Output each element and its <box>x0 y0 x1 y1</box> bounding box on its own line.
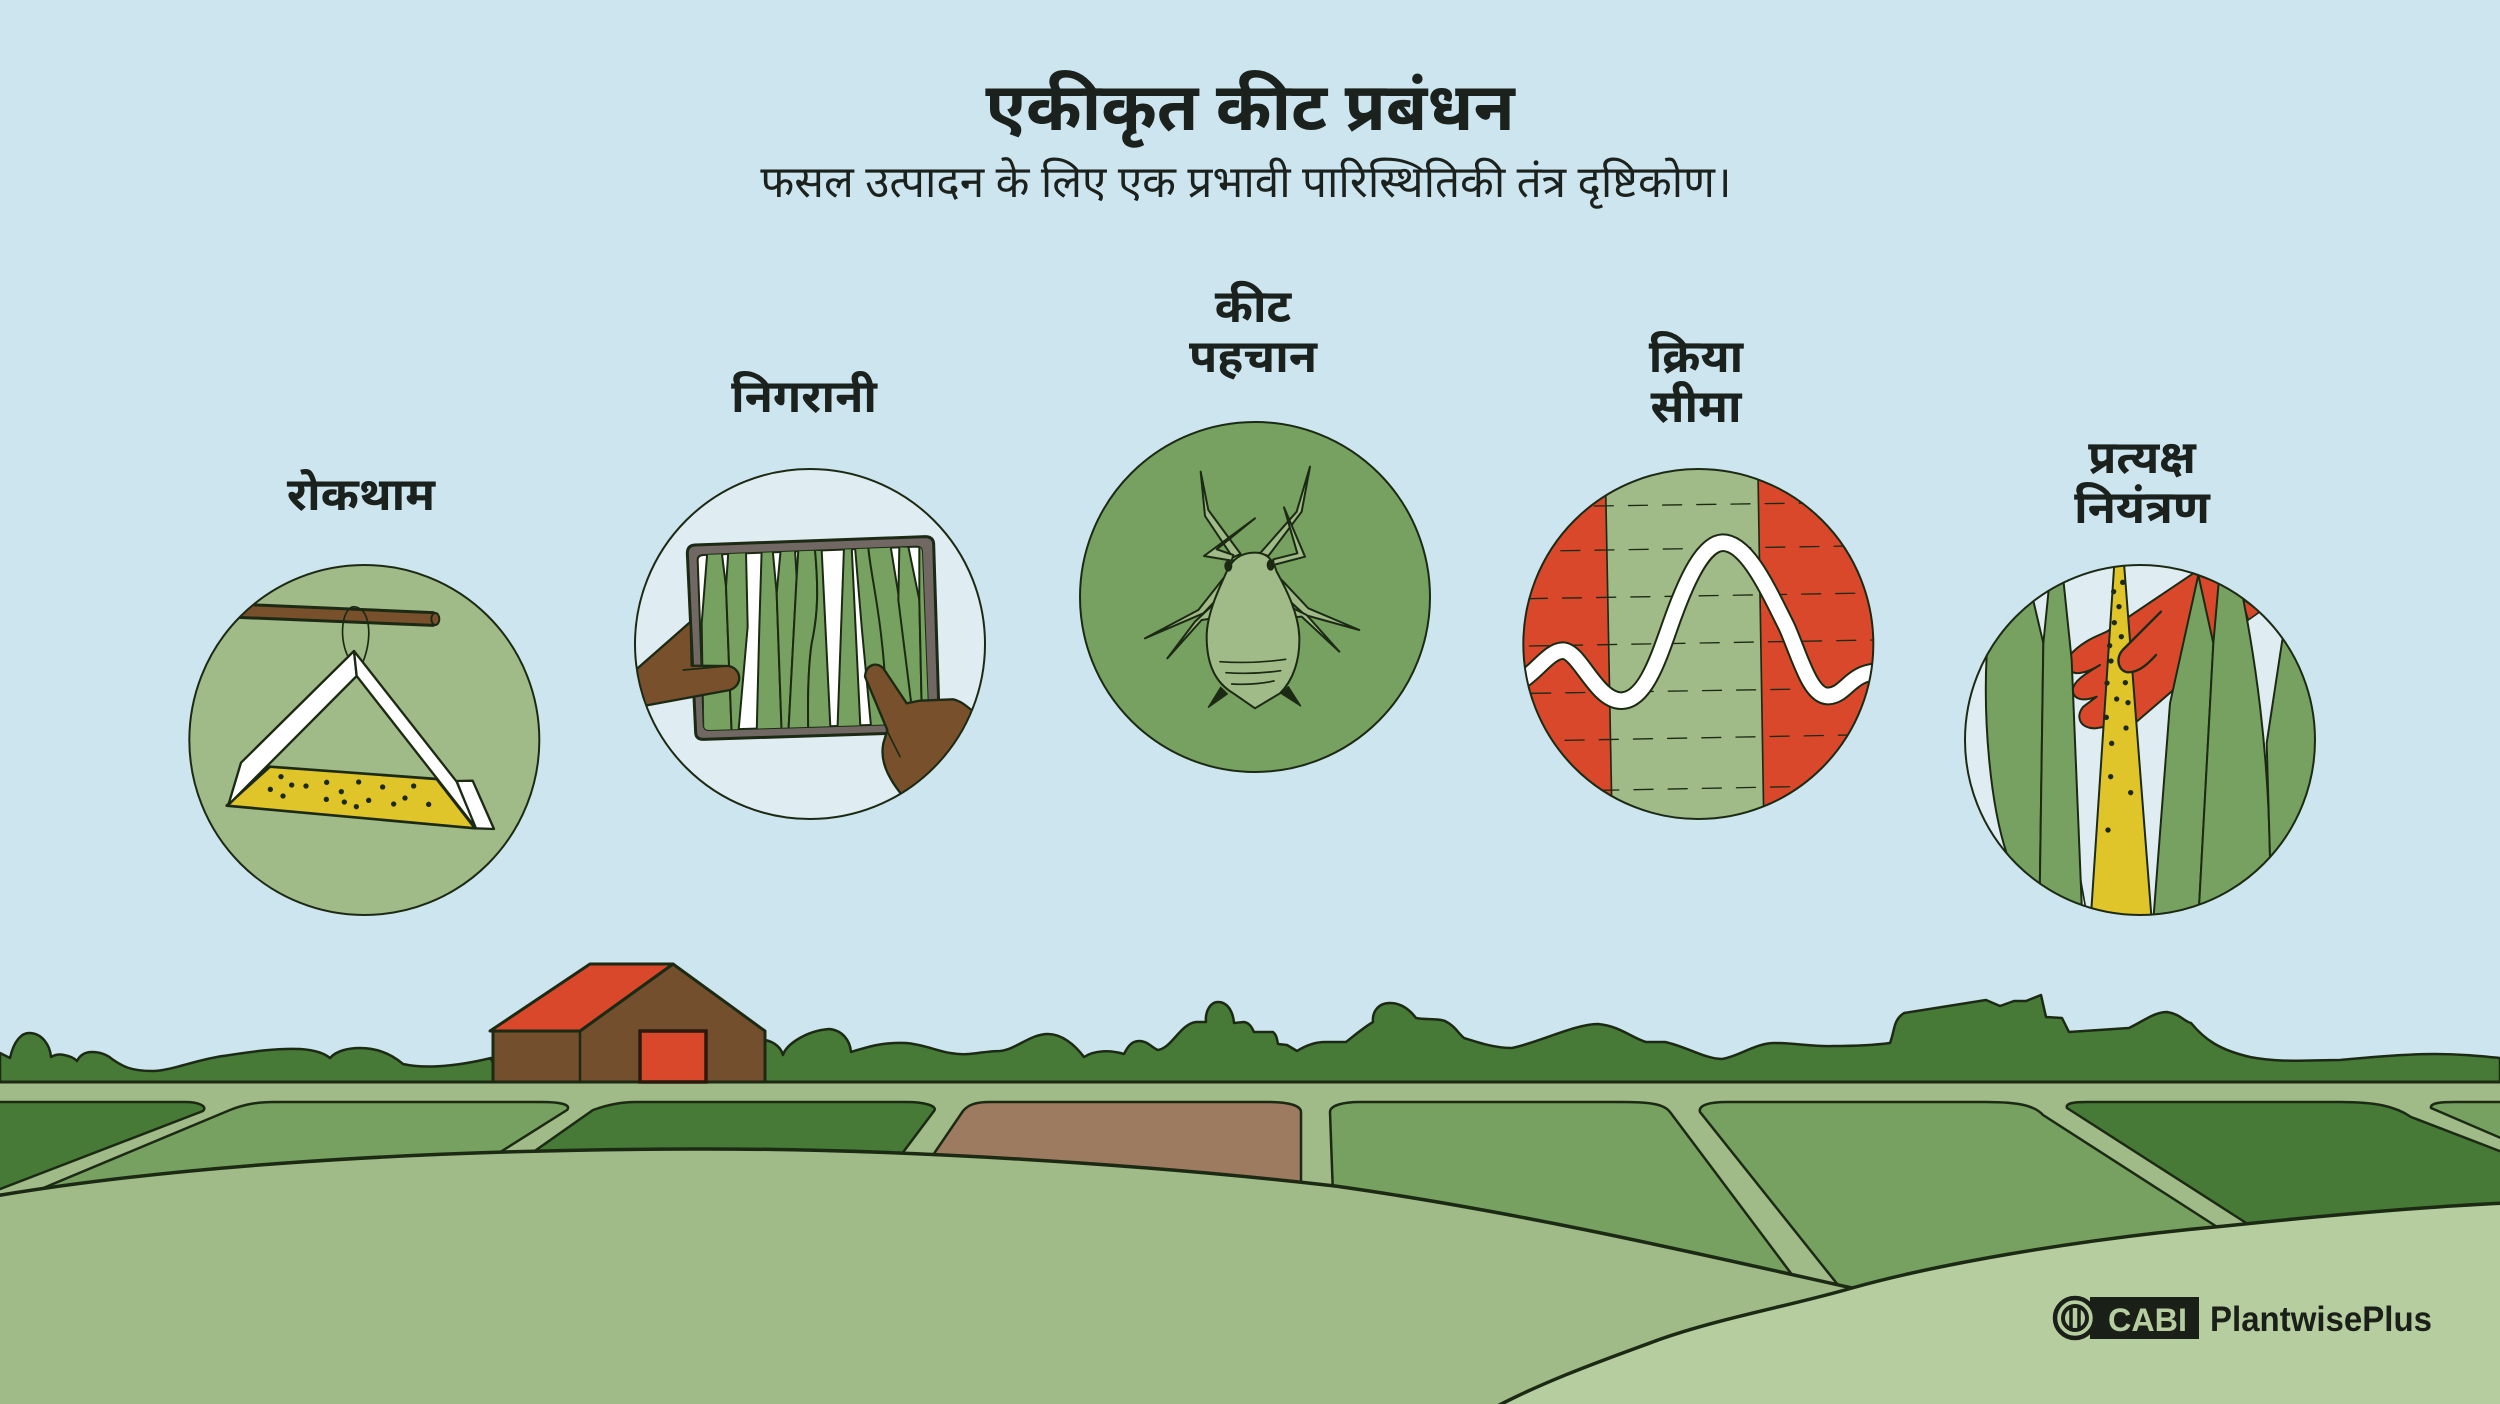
field 1 <box>0 1102 204 1191</box>
icon: sticky trap hanging from a stick <box>189 565 539 915</box>
field 2 <box>29 1102 568 1194</box>
horizon line <box>0 1080 2500 1084</box>
icon: hand removing infested leaf <box>1965 560 2323 920</box>
step: action threshold <box>1520 330 1880 853</box>
logo: CABI PlantwisePlus <box>2055 1297 2432 1339</box>
subtitle: फसल उत्पादन के लिए एक प्रभावी पारिस्थितिकी तंत्र दृष्टिकोण। <box>760 156 1732 215</box>
field 6 <box>1700 1102 2225 1295</box>
barn roof <box>490 964 673 1031</box>
icon: threshold chart <box>1522 468 1874 820</box>
heading: direct control: नियंत्रण <box>2074 481 2211 542</box>
step: prevention <box>189 468 539 915</box>
icon: hands holding a tablet showing crops <box>630 469 985 819</box>
field 5 <box>1330 1102 1796 1280</box>
heading: pest identification: पहचान <box>1189 331 1318 391</box>
field 4 <box>931 1102 1301 1190</box>
heading: direct control: प्रत्यक्ष <box>2088 432 2197 492</box>
CABI black box <box>2090 1297 2199 1339</box>
step: direct control <box>1965 432 2323 920</box>
heading: action threshold: सीमा <box>1650 380 1743 441</box>
landscape <box>0 964 2500 1404</box>
field 8 <box>2431 1102 2500 1142</box>
barn corner <box>579 1031 581 1082</box>
barn <box>490 964 765 1082</box>
step: monitoring <box>630 370 985 819</box>
step: pest identification <box>1080 280 1430 772</box>
title: एकीकृत कीट प्रबंधन <box>985 69 1516 158</box>
heading: action threshold: क्रिया <box>1649 330 1745 391</box>
fields <box>0 1102 2500 1295</box>
heading: pest identification: कीट <box>1215 280 1292 341</box>
field 3 <box>529 1102 935 1155</box>
tree line <box>0 995 2500 1082</box>
CABI emblem <box>2055 1298 2095 1338</box>
barn door <box>640 1031 706 1082</box>
heading: prevention: रोकथाम <box>287 468 436 529</box>
CABI wordmark: CABI <box>2108 1302 2187 1338</box>
far hill <box>1490 1203 2500 1404</box>
field 7 <box>2067 1102 2500 1228</box>
heading: monitoring: निगरानी <box>731 370 878 431</box>
icon: aphid <box>1080 422 1430 772</box>
PlantwisePlus wordmark: PlantwisePlus <box>2210 1300 2432 1339</box>
barn wall <box>493 964 765 1082</box>
ground strip <box>0 1082 2500 1404</box>
near hill <box>0 1149 1852 1404</box>
